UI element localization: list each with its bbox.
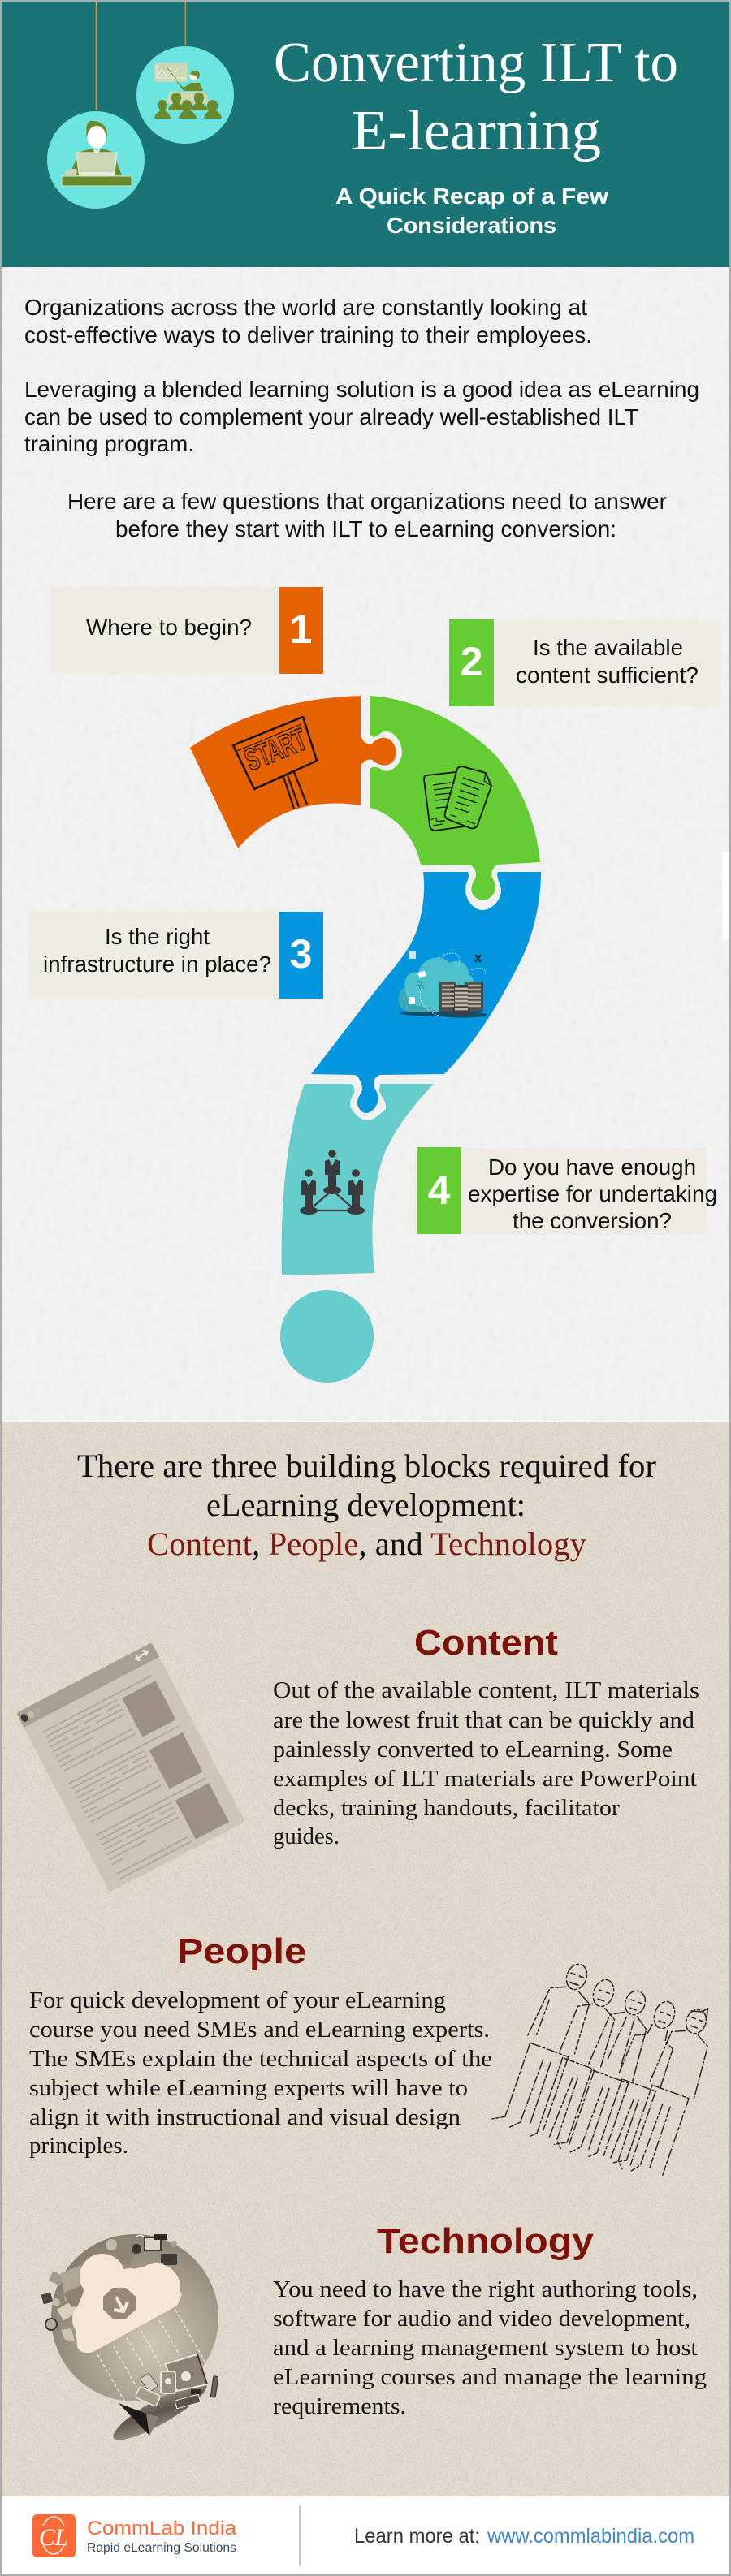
logo wordmark <box>87 2518 237 2555</box>
footer <box>2 2496 729 2574</box>
technology body text: and a learning management system to host <box>273 2336 698 2361</box>
people body text <box>29 1988 492 2159</box>
header banner <box>2 2 729 267</box>
devices <box>119 2354 218 2436</box>
content body text: Out of the available content, ILT materials <box>273 1678 699 1703</box>
question box 4: 4 <box>428 1167 451 1213</box>
icon: start sign: START <box>240 723 312 778</box>
intro text: can be used to complement your already well-established ILT <box>24 404 638 429</box>
icon: cloud and servers <box>399 951 487 1018</box>
subtitle: A Quick Recap of a Few <box>335 183 608 209</box>
intro text: training program. <box>24 431 194 456</box>
technology body text: eLearning courses and manage the learning <box>273 2365 707 2390</box>
content body text: painlessly converted to eLearning. Some <box>273 1737 673 1763</box>
question box 2: 2 <box>461 639 482 684</box>
title: Converting ILT to <box>274 32 678 94</box>
content heading: Content <box>414 1623 558 1663</box>
technology heading: Technology <box>377 2221 595 2261</box>
building blocks heading <box>77 1448 656 1562</box>
learn more link <box>354 2525 694 2548</box>
logo mark: CL <box>39 2524 68 2551</box>
people body text: principles. <box>29 2134 128 2159</box>
panel: people <box>29 1931 725 2182</box>
building blocks heading: There are three building blocks required for <box>77 1448 656 1484</box>
icon: connected people <box>300 1150 365 1215</box>
intro text <box>24 295 699 542</box>
subtitle <box>335 183 608 238</box>
question box 3: infrastructure in place? <box>43 951 271 977</box>
question box 2: content sufficient? <box>516 662 699 688</box>
learn more link: Learn more at: <box>354 2525 480 2548</box>
puzzle piece: orange start <box>190 696 396 848</box>
intro text: Leveraging a blended learning solution is a good idea as eLearning <box>24 377 699 402</box>
content body text: examples of ILT materials are PowerPoint <box>273 1767 697 1792</box>
content body text: decks, training handouts, facilitator <box>273 1796 621 1821</box>
question box 1: 1 <box>290 606 312 652</box>
icon: hanging ornament, person at laptop <box>47 2 145 209</box>
logo wordmark: CommLab India <box>87 2518 237 2539</box>
intro text: cost-effective ways to deliver training to their employees. <box>24 322 592 347</box>
icon: documents <box>424 766 491 831</box>
question box 4: the conversion? <box>513 1208 672 1233</box>
content body text: guides. <box>273 1824 340 1849</box>
question mark dot <box>280 1290 374 1383</box>
question box 1 <box>51 587 323 674</box>
question box 3 <box>28 912 323 999</box>
cloud <box>72 2254 182 2353</box>
people body text: course you need SMEs and eLearning experts. <box>29 2017 490 2043</box>
puzzle piece: teal expertise <box>282 1084 434 1275</box>
technology body text: software for audio and video development, <box>273 2306 690 2332</box>
question mark puzzle <box>190 696 541 1383</box>
title <box>274 32 678 162</box>
icon: start sign <box>233 717 317 809</box>
subtitle: Considerations <box>387 213 556 238</box>
people body text: subject while eLearning experts will have to <box>29 2076 468 2101</box>
question box 3: Is the right <box>105 924 210 949</box>
question box 4: Do you have enough <box>488 1154 696 1180</box>
dashed download lines <box>97 2310 205 2401</box>
question box 2 <box>449 619 721 706</box>
cloud download badge <box>103 2288 136 2319</box>
title: E-learning <box>352 100 601 162</box>
building blocks heading: eLearning development: <box>206 1486 526 1523</box>
logo wordmark: Rapid eLearning Solutions <box>87 2541 236 2555</box>
people heading: People <box>177 1931 306 1971</box>
intro text: Organizations across the world are constantly looking at <box>24 295 587 320</box>
panel: technology <box>41 2221 707 2449</box>
people body text: The SMEs explain the technical aspects of the <box>29 2047 492 2072</box>
logo mark <box>32 2514 76 2557</box>
question box 2: Is the available <box>533 635 683 660</box>
puzzle piece: blue infrastructure <box>311 872 541 1113</box>
intro text: Here are a few questions that organizations need to answer <box>67 489 667 514</box>
question box 1: Where to begin? <box>86 615 252 640</box>
technology body text: You need to have the right authoring tools, <box>273 2277 698 2302</box>
people body text: align it with instructional and visual design <box>29 2105 461 2130</box>
question box 4: expertise for undertaking <box>468 1181 717 1206</box>
content body text <box>273 1678 699 1849</box>
icon cluster: left small icons <box>41 2265 86 2341</box>
puzzle piece: green content <box>370 696 540 900</box>
panel: content <box>16 1623 699 1892</box>
icon: cloud globe with devices <box>41 2234 218 2449</box>
technology body text <box>273 2277 707 2419</box>
building blocks heading: Content, People, and Technology <box>147 1525 586 1562</box>
question box 3: 3 <box>290 931 312 977</box>
icon cluster: top small icons <box>106 2234 177 2265</box>
icon: hanging ornament, classroom presenter <box>136 2 234 144</box>
intro text: before they start with ILT to eLearning conversion: <box>115 516 616 542</box>
content body text: are the lowest fruit that can be quickly and <box>273 1708 694 1733</box>
technology body text: requirements. <box>273 2394 406 2419</box>
people body text: For quick development of your eLearning <box>29 1988 446 2013</box>
question box 4 <box>414 1147 717 1235</box>
icon: web page document <box>16 1642 245 1892</box>
icon: sketch of five people <box>491 1954 725 2182</box>
learn more link: www.commlabindia.com <box>487 2525 694 2548</box>
